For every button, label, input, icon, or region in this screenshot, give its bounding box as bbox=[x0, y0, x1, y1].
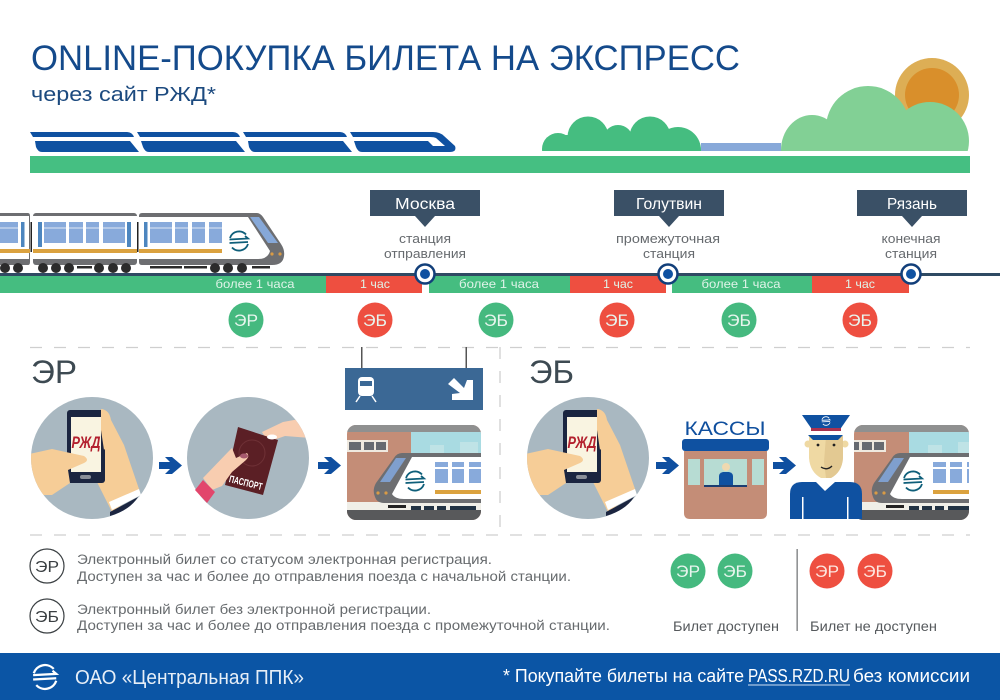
station: Москва: отправления bbox=[384, 247, 466, 261]
legend: ЭР description: Электронный билет со статусом электронная регистрация. bbox=[77, 552, 492, 567]
station: Рязань: Рязань bbox=[887, 196, 937, 213]
station: Голутвин: Голутвин bbox=[636, 196, 702, 213]
heading: ЭБ: ЭБ bbox=[529, 354, 574, 390]
station: Рязань: станция bbox=[885, 247, 937, 261]
heading: ЭР: ЭР bbox=[31, 354, 77, 390]
ticket type badges on timeline bbox=[228, 302, 878, 338]
footer bar bbox=[0, 653, 1000, 700]
icon: hand with phone (ЭР step 1) bbox=[25, 397, 153, 519]
legend: ticket not available: ЭР bbox=[815, 562, 839, 581]
legend: ticket not available: ЭБ bbox=[863, 562, 887, 581]
arrow bbox=[159, 457, 182, 474]
illustration: light green bushes bbox=[781, 86, 969, 151]
timeline track bbox=[0, 273, 1000, 276]
ticket type badges on timeline: ЭБ bbox=[484, 311, 508, 330]
footer company name: ОАО «Центральная ППК» bbox=[75, 667, 304, 689]
icon: hand with phone (ЭБ step 1) bbox=[521, 397, 649, 519]
ticket type badges on timeline: ЭР bbox=[234, 311, 258, 330]
timeline segments: более 1 часа bbox=[459, 277, 539, 291]
legend: ticket available: ЭБ bbox=[723, 562, 747, 581]
icon: passport in hands bbox=[187, 397, 310, 519]
legend: ticket not available bbox=[810, 554, 937, 634]
footer note: без комиссии bbox=[853, 666, 970, 686]
station direction sign bbox=[345, 347, 483, 410]
illustration: river bbox=[701, 143, 781, 151]
illustration: conductor bbox=[790, 415, 862, 519]
footer note bbox=[503, 666, 970, 686]
footer note: PASS.RZD.RU bbox=[748, 666, 850, 686]
timeline segments: более 1 часа bbox=[702, 277, 781, 291]
illustration: dark green bushes bbox=[542, 116, 701, 151]
timeline segments: более 1 часа bbox=[216, 277, 295, 291]
legend: ЭР description bbox=[30, 549, 571, 584]
legend: ЭР description: Доступен за час и более до отправления поезда с начальной станции. bbox=[77, 569, 571, 584]
illustration: blue express train bbox=[30, 132, 455, 152]
station: Голутвин bbox=[614, 190, 724, 284]
illustration: train at platform (ЭБ) bbox=[854, 425, 969, 520]
legend: ЭР description: ЭР bbox=[35, 559, 59, 576]
subtitle: через сайт РЖД* bbox=[31, 84, 216, 106]
legend: ЭБ description: ЭБ bbox=[35, 609, 59, 626]
station: Москва: станция bbox=[399, 232, 451, 246]
legend: ticket available: Билет доступен bbox=[673, 618, 779, 634]
illustration: sun bbox=[895, 58, 969, 132]
ticket type badges on timeline: ЭБ bbox=[605, 311, 629, 330]
legend: ЭБ description: Электронный билет без электронной регистрации. bbox=[77, 602, 431, 617]
station: Голутвин: станция bbox=[643, 247, 695, 261]
ticket type badges on timeline: ЭБ bbox=[727, 311, 751, 330]
footer logo bbox=[33, 665, 56, 689]
arrow bbox=[773, 457, 796, 474]
station: Рязань bbox=[857, 190, 967, 284]
legend: ticket available bbox=[670, 554, 779, 634]
footer note: * Покупайте билеты на сайте bbox=[503, 666, 744, 686]
station: Москва: Москва bbox=[395, 196, 455, 213]
ticket type badges on timeline: ЭБ bbox=[363, 311, 387, 330]
station: Москва bbox=[370, 190, 480, 284]
timeline segments bbox=[0, 276, 909, 293]
legend: ЭБ description: Доступен за час и более до отправления поезда с промежуточной станции. bbox=[77, 618, 610, 633]
ticket office bbox=[682, 419, 769, 519]
station: Голутвин: промежуточная bbox=[616, 232, 720, 246]
legend: ticket not available: Билет не доступен bbox=[810, 618, 937, 634]
ticket type badges on timeline: ЭБ bbox=[848, 311, 872, 330]
arrow bbox=[318, 457, 341, 474]
arrow bbox=[656, 457, 679, 474]
illustration: commuter train bbox=[0, 213, 284, 273]
illustration: ground strip bbox=[30, 156, 970, 173]
illustration: train at platform (ЭР) bbox=[347, 425, 481, 520]
timeline segments: 1 час bbox=[845, 277, 875, 291]
title: ONLINE-ПОКУПКА БИЛЕТА НА ЭКСПРЕСС bbox=[31, 39, 740, 78]
legend: ЭБ description bbox=[30, 599, 610, 633]
icon: passport in hands: ПАСПОРТ bbox=[228, 474, 263, 493]
station: Рязань: конечная bbox=[882, 232, 940, 246]
legend: ticket available: ЭР bbox=[676, 562, 700, 581]
ticket office: КАССЫ bbox=[684, 419, 766, 440]
timeline segments: 1 час bbox=[603, 277, 633, 291]
timeline segments: 1 час bbox=[360, 277, 390, 291]
